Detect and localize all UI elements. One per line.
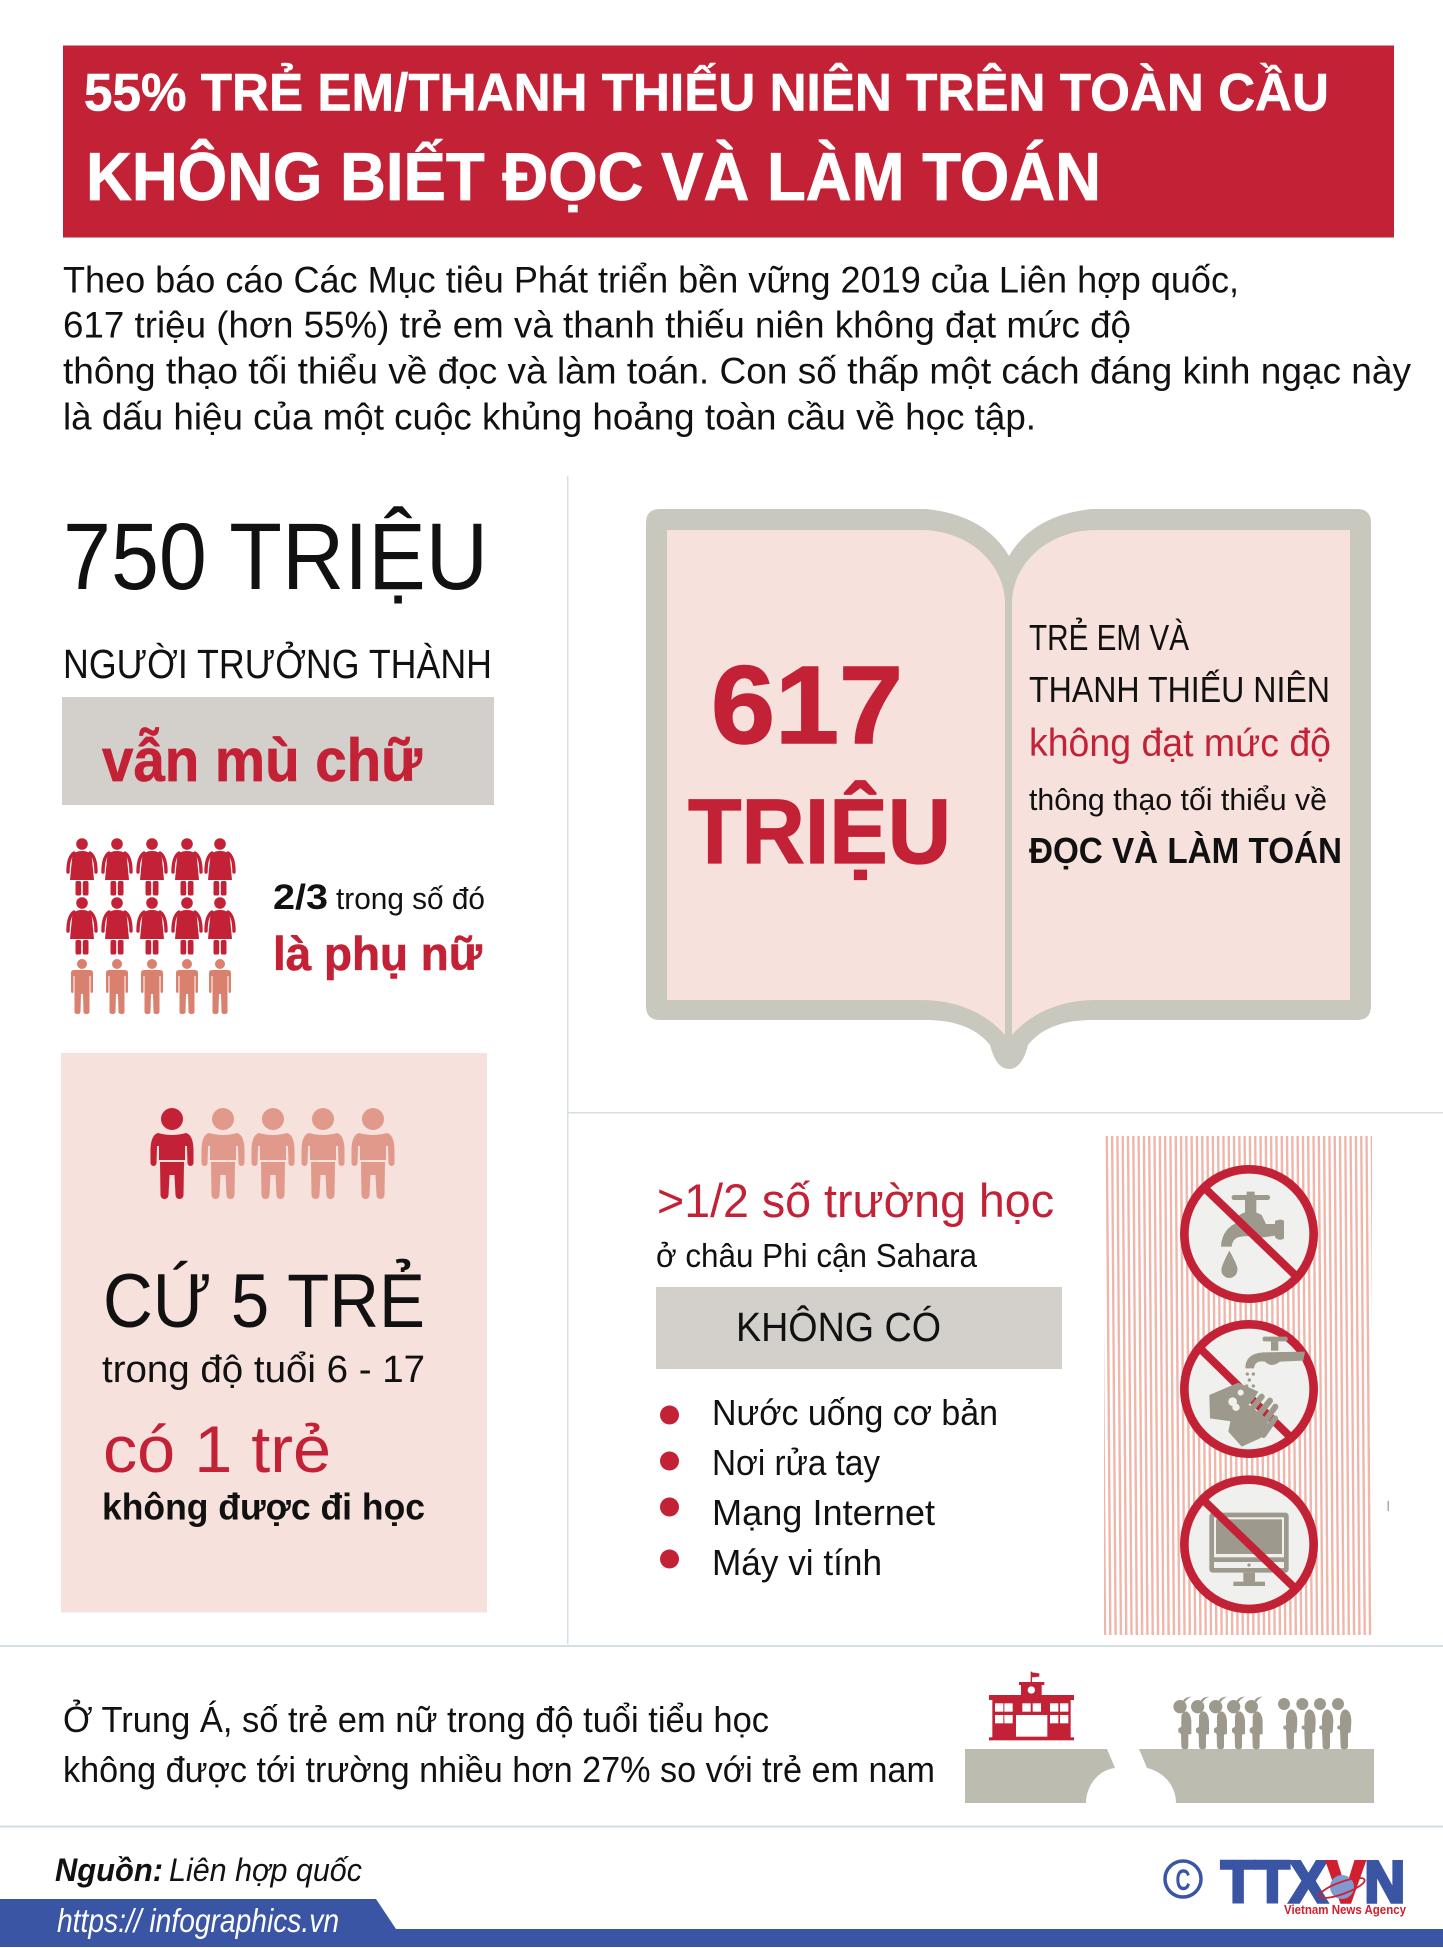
heading: more than half of schools: >1/2 số trường học — [657, 1174, 1054, 1227]
stat: two thirds women — [273, 878, 485, 980]
right page text: không đạt mức độ — [1029, 722, 1331, 765]
icon: no computer — [1184, 1480, 1314, 1609]
icon grid: women and men — [68, 838, 234, 1014]
logo: TTXVN: Vietnam News Agency — [1284, 1902, 1407, 1917]
bullet list: Máy vi tính — [712, 1542, 882, 1583]
icon: no drinking water — [1184, 1169, 1314, 1299]
intro paragraph: là dấu hiệu của một cuộc khủng hoảng toàn cầu về học tập. — [63, 396, 1036, 438]
title banner — [63, 46, 1394, 238]
source note — [55, 1852, 362, 1888]
text: Central Asia girls: không được tới trường nhiều hơn 27% so với trẻ em nam — [63, 1749, 935, 1790]
website: https:// infographics.vn — [57, 1902, 339, 1939]
icon: queue of out-of-school children — [1173, 1697, 1351, 1749]
title line 1: 55% TRẺ EM/THANH THIẾU NIÊN TRÊN TOÀN CẦU — [84, 62, 1329, 122]
book: 617 million — [646, 509, 1371, 1069]
text: one child: có 1 trẻ — [103, 1412, 331, 1486]
intro paragraph: thông thạo tối thiểu về đọc và làm toán. Con số thấp một cách đáng kinh ngạc này — [63, 350, 1411, 392]
intro paragraph — [63, 260, 1411, 438]
stat: two thirds women: 2/3 — [273, 878, 328, 917]
bullet list — [660, 1392, 998, 1583]
intro paragraph: Theo báo cáo Các Mục tiêu Phát triển bền vững 2019 của Liên hợp quốc, — [63, 260, 1239, 300]
source note: Nguồn: — [55, 1852, 163, 1888]
text: every 5 children: CỨ 5 TRẺ — [103, 1259, 425, 1344]
copyright mark — [1165, 1861, 1201, 1897]
left page — [667, 530, 1005, 1035]
banner: illiterate — [62, 697, 494, 805]
illustration: cliff gap — [965, 1749, 1374, 1803]
right page text: THANH THIẾU NIÊN — [1029, 669, 1330, 710]
right page text: thông thạo tối thiểu về — [1029, 782, 1327, 817]
title line 2: KHÔNG BIẾT ĐỌC VÀ LÀM TOÁN — [86, 138, 1101, 215]
source note: Liên hợp quốc — [169, 1852, 362, 1888]
right page — [1012, 530, 1350, 1035]
right page text: ĐỌC VÀ LÀM TOÁN — [1029, 830, 1342, 871]
subheading: sub-Saharan Africa: ở châu Phi cận Sahara — [656, 1237, 978, 1274]
intro paragraph: 617 triệu (hơn 55%) trẻ em và thanh thiếu niên không đạt mức độ — [63, 304, 1131, 346]
footer bar — [0, 1899, 1443, 1947]
banner: do not have: KHÔNG CÓ — [736, 1304, 941, 1350]
stat: two thirds women: là phụ nữ — [273, 927, 483, 980]
striped background for icons — [1104, 1136, 1372, 1635]
right page text: TRẺ EM VÀ — [1029, 617, 1189, 658]
text: Central Asia girls — [63, 1698, 935, 1790]
subheading: adults: NGƯỜI TRƯỞNG THÀNH — [63, 641, 492, 687]
bullet list: Mạng Internet — [712, 1492, 935, 1533]
panel: out of school children — [61, 1053, 487, 1612]
icon row: five children — [150, 1108, 394, 1199]
panel: 750 million adults — [62, 504, 494, 1014]
text: ages 6-17: trong độ tuổi 6 - 17 — [102, 1349, 425, 1391]
icon: no hand washing — [1184, 1324, 1314, 1454]
icon: school — [989, 1672, 1074, 1740]
text: Central Asia girls: Ở Trung Á, số trẻ em nữ trong độ tuổi tiểu học — [63, 1698, 769, 1740]
stat: two thirds women: trong số đó — [336, 881, 485, 916]
bullet list: Nơi rửa tay — [712, 1442, 880, 1483]
text: not in school: không được đi học — [102, 1486, 425, 1528]
panel: sub-Saharan schools — [656, 1174, 1062, 1583]
copyright mark: C — [1176, 1864, 1190, 1897]
number unit: triệu: TRIỆU — [688, 780, 951, 883]
number: 617: 617 — [711, 644, 903, 767]
banner: illiterate: vẫn mù chữ — [102, 727, 423, 794]
bullet list: Nước uống cơ bản — [712, 1392, 998, 1433]
book cover — [646, 509, 1371, 1069]
heading: 750 triệu: 750 TRIỆU — [63, 504, 488, 610]
banner: do not have — [656, 1287, 1062, 1369]
logo: TTXVN: TTXVN — [1221, 1850, 1405, 1915]
right page text — [1029, 617, 1342, 871]
